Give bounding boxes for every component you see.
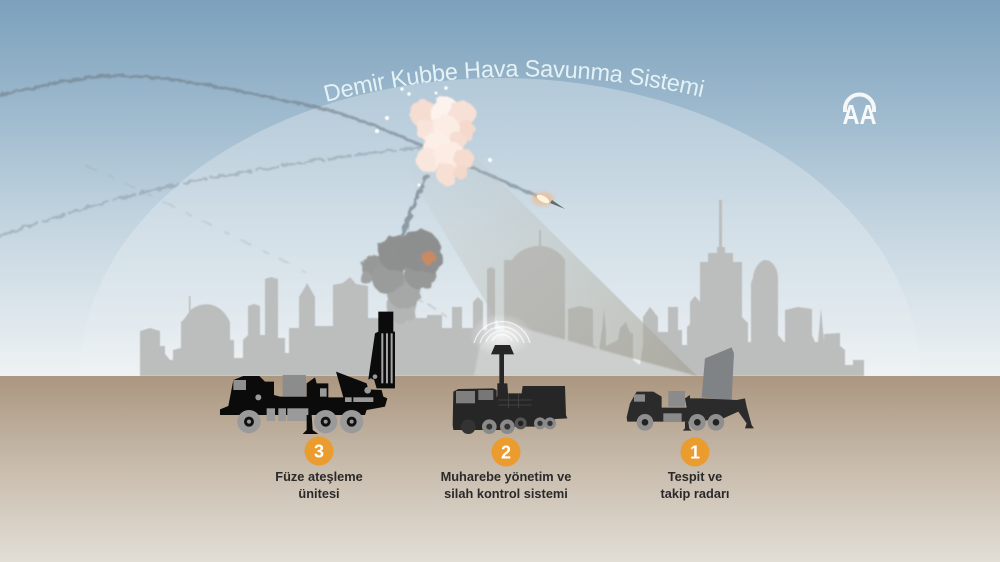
badge 3: 3 [314,442,324,462]
launcher tower [368,312,395,388]
badge 2: 2 [501,442,511,462]
intercepted missile [532,192,565,209]
electronics grid [498,393,532,408]
command link beam [474,322,695,376]
badge 1: 1 [690,442,700,462]
truck body [220,372,387,415]
vehicle 1: radar [627,347,754,431]
truck body [453,386,567,430]
cab windows [456,391,475,403]
cab window [634,394,645,402]
smoke cloud over city [360,229,443,323]
label 2: silah kontrol sistemi [444,486,568,501]
ground [0,376,1000,562]
badge 2 [492,438,520,466]
vehicle 3: missile launcher [220,312,395,434]
label 1: Tespit ve [668,469,722,484]
wheels [461,417,556,434]
radio signal waves [469,313,533,357]
defense dome [80,78,920,376]
sky background [0,0,1000,376]
radar panel [702,347,734,401]
label 3: ünitesi [298,486,340,501]
wheels [637,414,724,431]
badge 3 [304,436,334,466]
radar beam towards the interception [408,112,697,376]
badge 1 [680,438,710,466]
antenna mast [491,345,514,398]
side panels and joints [255,374,377,421]
truck body [627,392,754,428]
label 1: takip radarı [660,486,730,501]
city skyline [140,200,864,376]
smoke trails [0,76,548,318]
label 3: Füze ateşleme [275,469,363,484]
debris sparks [375,86,492,186]
label 2: Muharebe yönetim ve [441,469,571,484]
Anadolu Agency logo: AA [842,99,876,130]
title: Demir Kubbe Hava Savunma Sistemi [324,60,704,102]
container [668,391,685,407]
grey container [283,375,306,397]
outrigger [303,415,318,434]
vehicle 2: command and control [453,345,567,434]
explosion [410,97,476,185]
outrigger [683,422,692,431]
cab window [233,380,246,390]
launcher tube slits [381,333,393,383]
wheels [237,410,363,433]
side panel [663,413,682,422]
